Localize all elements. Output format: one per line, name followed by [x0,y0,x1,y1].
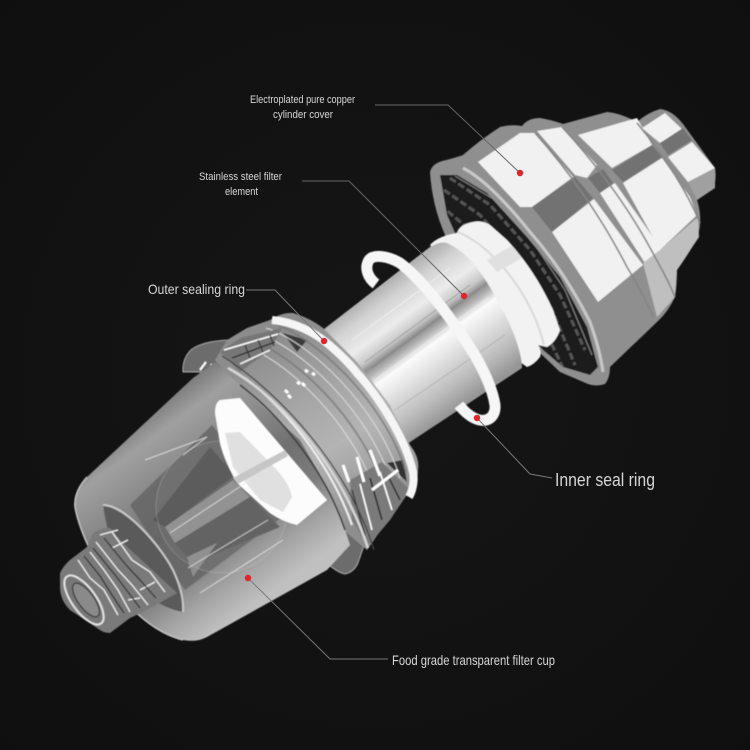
threaded shoulder [215,313,418,550]
cup rib arcs [222,356,374,550]
outer sealing ring [272,320,414,497]
cover ridges [535,123,700,317]
label: filter element: element [225,186,258,198]
label: filter element: Stainless steel filter [199,171,282,183]
label: inner seal ring: Inner seal ring [555,470,655,490]
dark reflection stripe [532,128,692,232]
cup base rim arc [103,505,183,612]
shoulder shadow arcs [250,323,406,490]
leader: inner seal ring [477,418,552,478]
white inner disc [215,398,327,525]
faint inner sphere [156,441,288,573]
stainless steel filter element [315,221,560,452]
glass highlights [145,437,283,593]
brushed cylinder detail [352,268,505,410]
lower thread [350,462,410,546]
label: filter cup: Food grade transparent filter cup [392,652,555,668]
inner lower light [187,543,217,577]
inner core shade [130,425,285,590]
shoulder windows [283,333,307,352]
leader: filter cup [248,578,388,659]
cover rim highlight [463,168,603,372]
inner light band [165,480,250,543]
collar shaded band [487,246,522,272]
leader: filter element [302,181,464,296]
inner dark block [153,447,235,527]
transparent filter cup [57,313,418,641]
thread notches [285,370,380,482]
nozzle thread shadows [84,538,156,613]
nozzle thread glints [78,530,165,615]
lower shaded surfaces [643,217,699,317]
threaded nozzle [57,528,177,633]
shoulder arcs [242,328,400,495]
label: copper cover: Electroplated pure copper [250,94,355,106]
cup base edge [75,477,183,640]
label: copper cover [250,94,355,121]
white collar and flange [430,221,560,367]
cone body [75,362,350,641]
nozzle opening [57,569,111,631]
exploded product [57,109,716,641]
inner seal ring [367,256,495,420]
upper thread [200,328,282,376]
marker dots [245,170,523,581]
cup flange tabs [183,340,245,372]
collar groove [458,232,544,345]
cover threaded interior [440,174,598,376]
inner lower block [175,497,280,563]
label: outer sealing ring: Outer sealing ring [148,281,245,297]
cover silhouette [430,109,716,386]
leader: cover [375,105,520,173]
label: filter element [199,171,282,198]
polished bands [478,113,715,302]
label: copper cover: cylinder cover [273,109,333,121]
copper cylinder cover [430,109,716,386]
cup base recess [103,505,183,612]
leader: outer sealing ring [246,290,324,341]
steel cylinder [315,242,522,452]
